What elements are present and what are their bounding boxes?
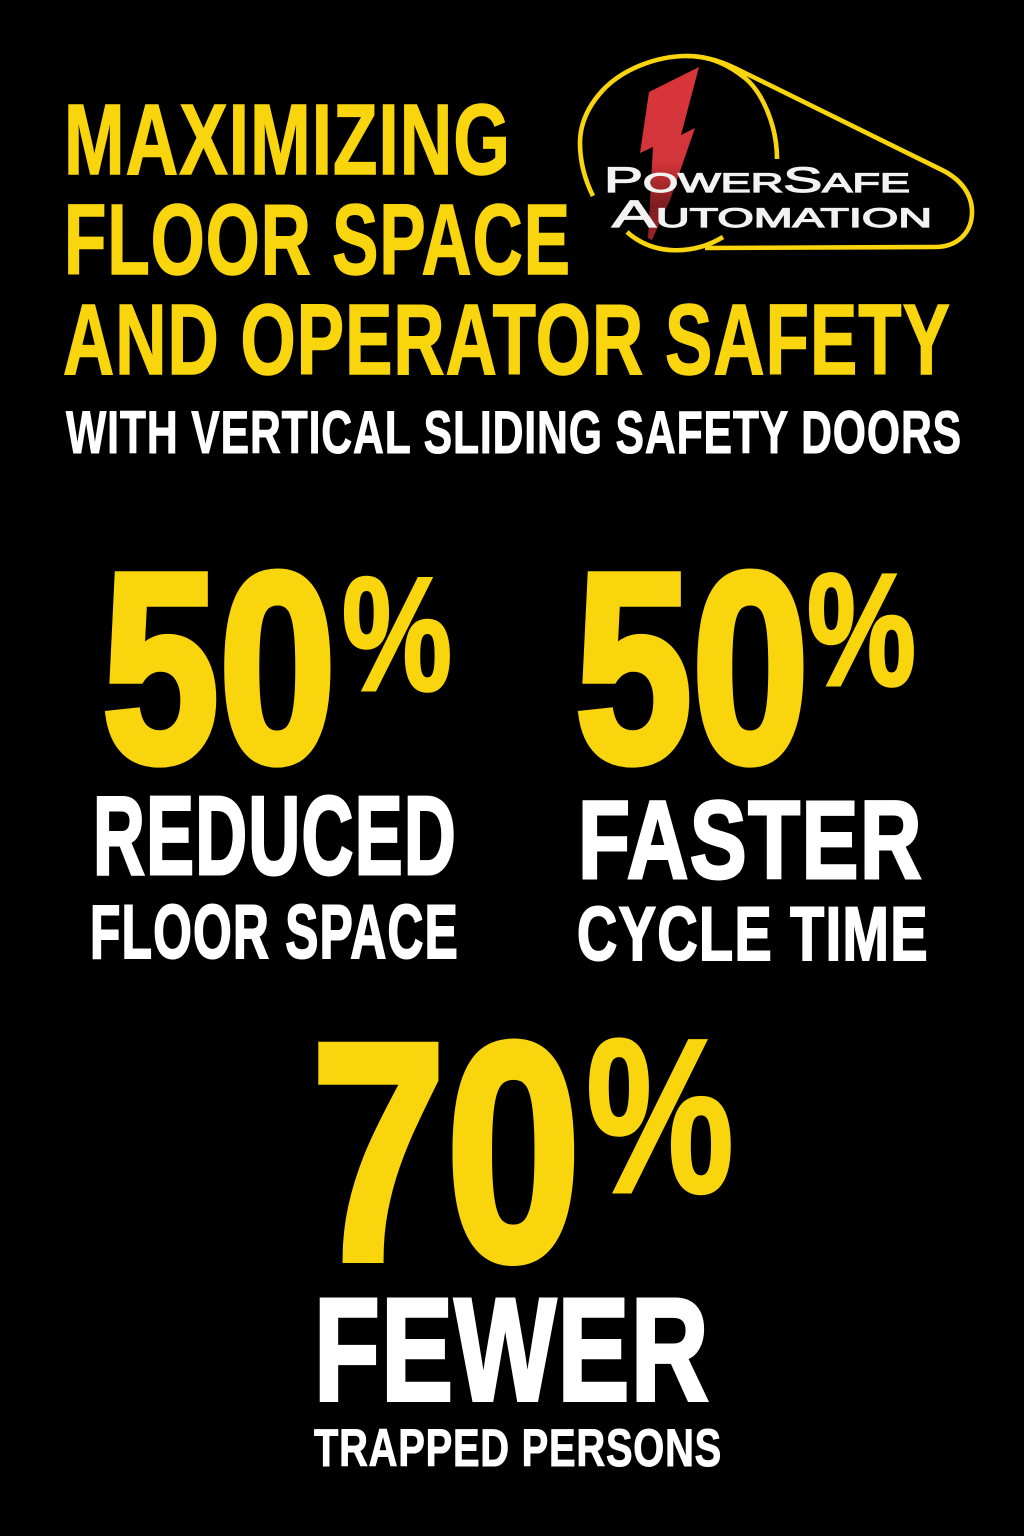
title: FLOOR SPACE	[64, 184, 571, 296]
label: FASTER	[578, 779, 923, 902]
title: MAXIMIZING	[64, 84, 511, 196]
sublabel: TRAPPED PERSONS	[314, 1419, 722, 1478]
number: 50	[102, 518, 336, 819]
label: FEWER	[314, 1268, 710, 1431]
logo: PowerSafe Automation: A UTOMATION	[612, 194, 932, 236]
title	[63, 84, 951, 396]
sublabel: FLOOR SPACE	[90, 890, 459, 975]
number: 70	[311, 978, 581, 1325]
label: REDUCED	[93, 774, 457, 898]
percent sign: %	[342, 544, 452, 725]
percent sign: %	[586, 993, 734, 1239]
logo outline: yellow swoosh	[580, 56, 972, 250]
number: 50	[575, 518, 809, 819]
stat: 50% reduced floor space	[90, 518, 459, 975]
logo: PowerSafe Automation	[580, 56, 972, 250]
stat: 50% faster cycle time	[575, 518, 929, 977]
logo wordmark: P OWER S AFE	[604, 161, 910, 200]
percent sign: %	[807, 540, 916, 719]
stat: 70% fewer trapped persons	[311, 978, 734, 1478]
icon: red lightning bolt	[640, 67, 699, 240]
